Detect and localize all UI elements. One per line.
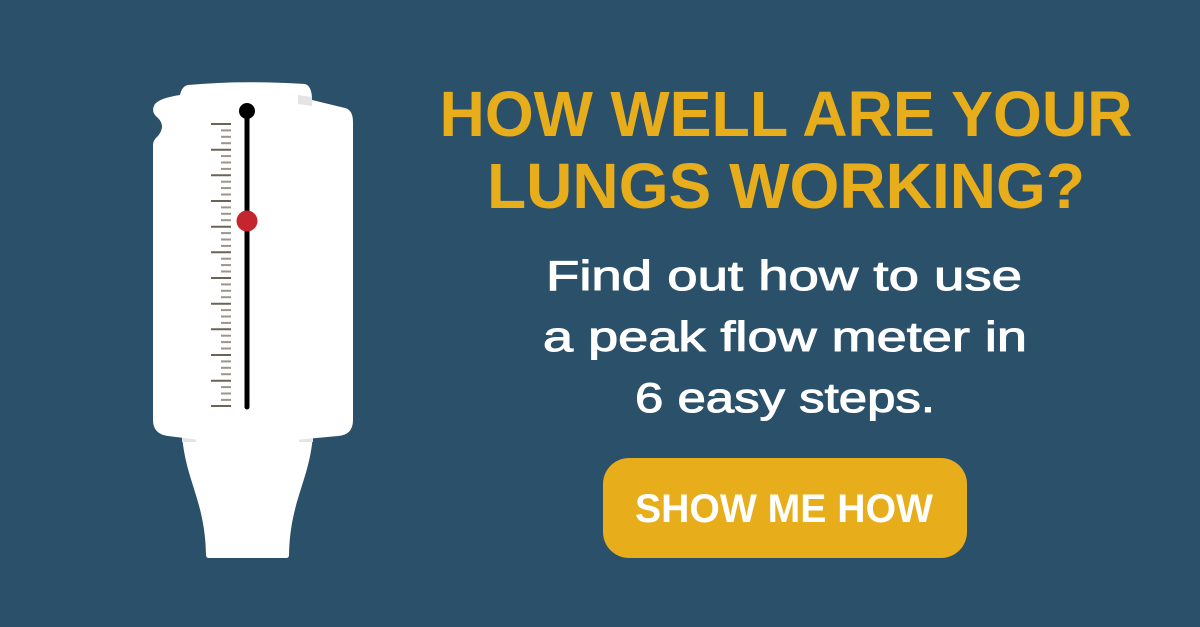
scale ticks	[211, 124, 231, 406]
subtitle: a peak flow meter in	[543, 313, 1027, 360]
title: HOW WELL ARE YOUR	[440, 78, 1132, 150]
indicator track	[244, 111, 250, 407]
title	[440, 78, 1132, 222]
icon: peak flow meter	[153, 82, 353, 558]
button: show me how: SHOW ME HOW	[635, 487, 933, 531]
meter nozzle	[182, 434, 313, 558]
button: show me how	[603, 458, 967, 558]
title: LUNGS WORKING?	[487, 150, 1085, 222]
subtitle: 6 easy steps.	[635, 374, 935, 421]
red reading marker	[236, 210, 258, 232]
black top marker	[239, 103, 255, 119]
subtitle: Find out how to use	[546, 252, 1022, 299]
meter body	[153, 82, 353, 440]
subtitle	[543, 252, 1027, 421]
